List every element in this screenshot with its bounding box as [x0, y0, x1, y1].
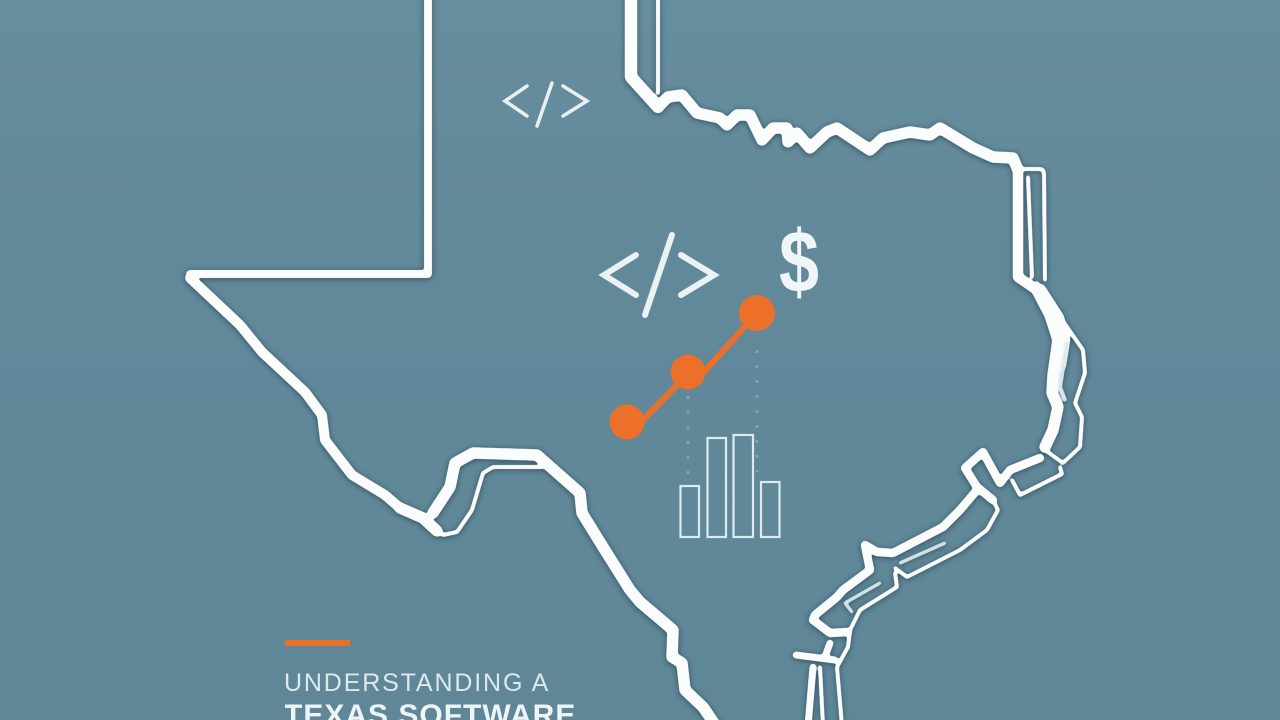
east border thin edge: [1023, 169, 1085, 463]
south tip thin edge: [820, 667, 823, 720]
east band: [1037, 290, 1058, 447]
small code icon: [505, 83, 587, 126]
coast inner marks: [845, 543, 945, 612]
north panhandle thin edge: [656, 0, 660, 93]
dollar icon: $: [779, 213, 819, 312]
southwest border and Rio Grande: [400, 453, 716, 720]
south tip: [796, 643, 835, 720]
title block: [285, 640, 576, 720]
Red River border: [658, 95, 1018, 170]
title line one: UNDERSTANDING A: [285, 669, 550, 697]
southwest border: [190, 278, 400, 508]
Gulf coast thin edge: [837, 467, 1062, 720]
Rio Grande thin edge: [427, 467, 542, 535]
faint dotted guides: [688, 350, 757, 478]
west panhandle edge: [190, 0, 428, 274]
bar chart: [680, 435, 780, 537]
orange trend line: [610, 295, 775, 440]
east inner highlight: [1060, 343, 1067, 400]
Gulf coast upper hook: [813, 452, 1040, 633]
Texas outline: [190, 0, 1085, 720]
east band highlight: [1040, 290, 1064, 365]
east border: [1018, 170, 1037, 290]
large code icon: [604, 235, 714, 315]
accent rule: [285, 640, 350, 646]
north panhandle edge: [631, 0, 658, 107]
